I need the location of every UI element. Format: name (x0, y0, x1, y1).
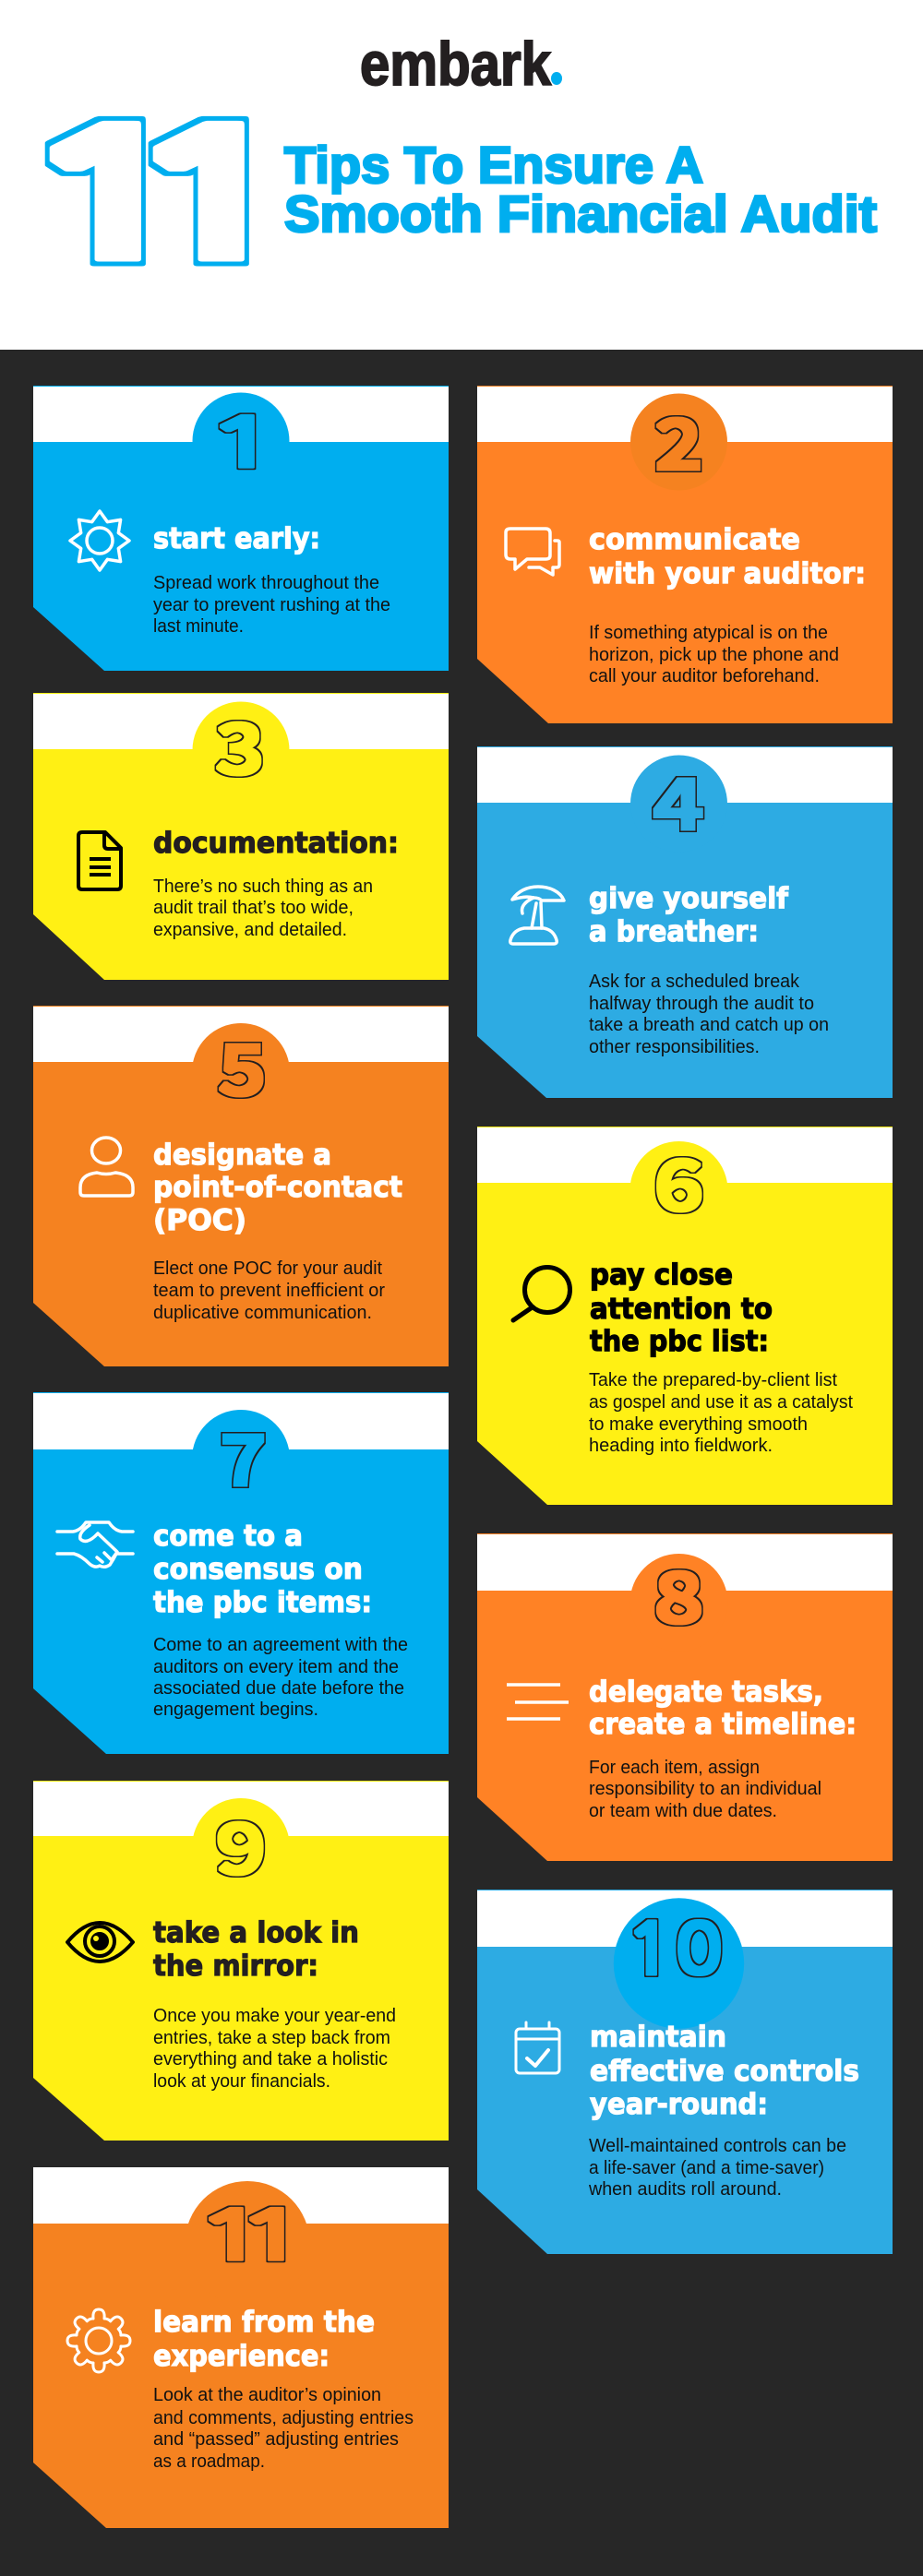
heading: pay close (590, 1258, 733, 1292)
body text (153, 877, 373, 940)
body text (153, 2385, 414, 2472)
body text: horizon, pick up the phone and (589, 645, 839, 665)
heading: (POC) (153, 1204, 246, 1237)
panel: tip 3 documentation (33, 693, 449, 980)
body text: year to prevent rushing at the (153, 595, 390, 615)
body text: call your auditor beforehand. (589, 666, 820, 686)
heading (589, 1676, 857, 1741)
number 5: 5 (218, 1014, 267, 1115)
body text: Ask for a scheduled break (589, 972, 800, 992)
heading (153, 1520, 372, 1619)
body text: audit trail that’s too wide, (153, 898, 354, 918)
panel: tip 1 start early (33, 386, 449, 671)
heading: experience: (153, 2340, 330, 2373)
body text: duplicative communication. (153, 1303, 372, 1323)
body text: as gospel and use it as a catalyst (589, 1392, 853, 1413)
body text: take a breath and catch up on (589, 1015, 829, 1035)
heading: come to a (153, 1520, 303, 1553)
panel: tip 10 effective controls (477, 1890, 893, 2254)
body text: expansive, and detailed. (153, 920, 347, 940)
body text: entries, take a step back from (153, 2028, 390, 2048)
number 11: 11 (193, 2202, 312, 2270)
body text: Come to an agreement with the (153, 1635, 408, 1655)
heading: year-round: (590, 2088, 768, 2121)
body text (153, 2006, 396, 2092)
heading (589, 882, 788, 948)
body text: as a roadmap. (153, 2451, 265, 2472)
body text: when audits roll around. (588, 2179, 782, 2200)
panel: tip 6 pbc list (477, 1127, 893, 1505)
body text: Well-maintained controls can be (589, 2136, 846, 2156)
number 6: 6 (653, 1129, 704, 1231)
panel: tip 5 point of contact (33, 1006, 449, 1366)
panel: tip 4 breather (477, 746, 893, 1098)
heading: effective controls (590, 2055, 859, 2088)
title (284, 136, 877, 243)
body text: halfway through the audit to (589, 994, 814, 1014)
body text: and “passed” adjusting entries (153, 2429, 399, 2450)
heading: take a look in (153, 1916, 359, 1950)
body text (153, 1635, 408, 1720)
heading (153, 2306, 375, 2373)
body text (153, 573, 390, 637)
body text: responsibility to an individual (589, 1779, 821, 1799)
body text: to make everything smooth (589, 1414, 808, 1435)
body text: associated due date before the (153, 1678, 404, 1699)
title: Smooth Financial Audit (284, 185, 877, 243)
heading: consensus on (153, 1553, 363, 1586)
heading: attention to (590, 1293, 773, 1326)
number 9: 9 (215, 1793, 267, 1894)
heading: point-of-contact (153, 1171, 402, 1204)
heading: maintain (590, 2021, 726, 2054)
body text: heading into fieldwork. (589, 1436, 773, 1456)
panel: tip 9 mirror (33, 1781, 449, 2141)
body text (153, 1258, 385, 1323)
panel: tip 11 learn from experience (33, 2167, 449, 2528)
icon: calendar (516, 2022, 559, 2073)
number 3: 3 (215, 693, 265, 794)
body text (589, 1370, 853, 1456)
number 7: 7 (220, 1404, 267, 1506)
body text: For each item, assign (589, 1758, 760, 1778)
number 2: 2 (654, 388, 703, 490)
icon: palm island (510, 887, 564, 944)
heading: create a timeline: (589, 1708, 857, 1741)
heading: with your auditor: (589, 557, 866, 590)
panel: tip 7 consensus (33, 1392, 449, 1754)
logo: embark: embark (360, 30, 551, 98)
body text: Elect one POC for your audit (153, 1258, 382, 1279)
body text: auditors on every item and the (153, 1657, 399, 1677)
heading (590, 1258, 773, 1358)
title: Tips To Ensure A (284, 136, 703, 194)
body text: Once you make your year-end (153, 2006, 396, 2026)
body text: look at your financials. (153, 2071, 330, 2092)
heading: delegate tasks, (589, 1676, 823, 1709)
heading (153, 1916, 359, 1983)
icon: chat bubbles (506, 529, 559, 575)
heading: designate a (153, 1139, 331, 1172)
heading (589, 523, 866, 590)
body text: If something atypical is on the (589, 623, 828, 643)
big outlined number 11: 11 (16, 113, 309, 280)
heading: the pbc list: (590, 1325, 769, 1358)
body text (589, 1758, 821, 1821)
body text (588, 2136, 846, 2200)
icon: person (80, 1138, 133, 1196)
heading: documentation: (153, 827, 399, 860)
icon: magnifying glass (513, 1268, 570, 1320)
body text: other responsibilities. (589, 1037, 760, 1057)
body text: Look at the auditor’s opinion (153, 2385, 381, 2405)
body text: There’s no such thing as an (153, 877, 373, 897)
heading: the pbc items: (153, 1586, 372, 1619)
body text: team to prevent inefficient or (153, 1281, 385, 1301)
number 4: 4 (653, 748, 704, 850)
body text: everything and take a holistic (153, 2049, 388, 2069)
heading: start early: (153, 522, 320, 555)
heading: learn from the (153, 2306, 375, 2339)
body text: and comments, adjusting entries (153, 2408, 414, 2428)
heading: communicate (589, 523, 800, 556)
panel: tip 2 communicate (477, 386, 893, 723)
heading (153, 1139, 402, 1237)
heading: a breather: (589, 915, 759, 948)
heading (590, 2021, 859, 2121)
body text (589, 972, 829, 1057)
icon: gear (67, 2309, 130, 2372)
icon: document (78, 832, 121, 889)
body text: engagement begins. (153, 1699, 318, 1720)
icon: eye (67, 1923, 133, 1962)
body text: Spread work throughout the (153, 573, 379, 593)
number 1: 1 (204, 410, 282, 477)
heading: give yourself (589, 882, 788, 915)
icon: sun (70, 511, 129, 570)
body text: or team with due dates. (589, 1801, 777, 1821)
body text: last minute. (153, 616, 244, 637)
body text (589, 623, 839, 686)
heading: the mirror: (153, 1950, 318, 1983)
body text: a life-saver (and a time-saver) (589, 2158, 824, 2178)
panel: tip 8 delegate tasks (477, 1533, 893, 1861)
icon: lines (507, 1685, 569, 1719)
number 8: 8 (653, 1542, 704, 1643)
icon: handshake (57, 1522, 133, 1567)
number 10: 10 (625, 1916, 724, 1986)
body text: Take the prepared-by-client list (589, 1370, 837, 1390)
